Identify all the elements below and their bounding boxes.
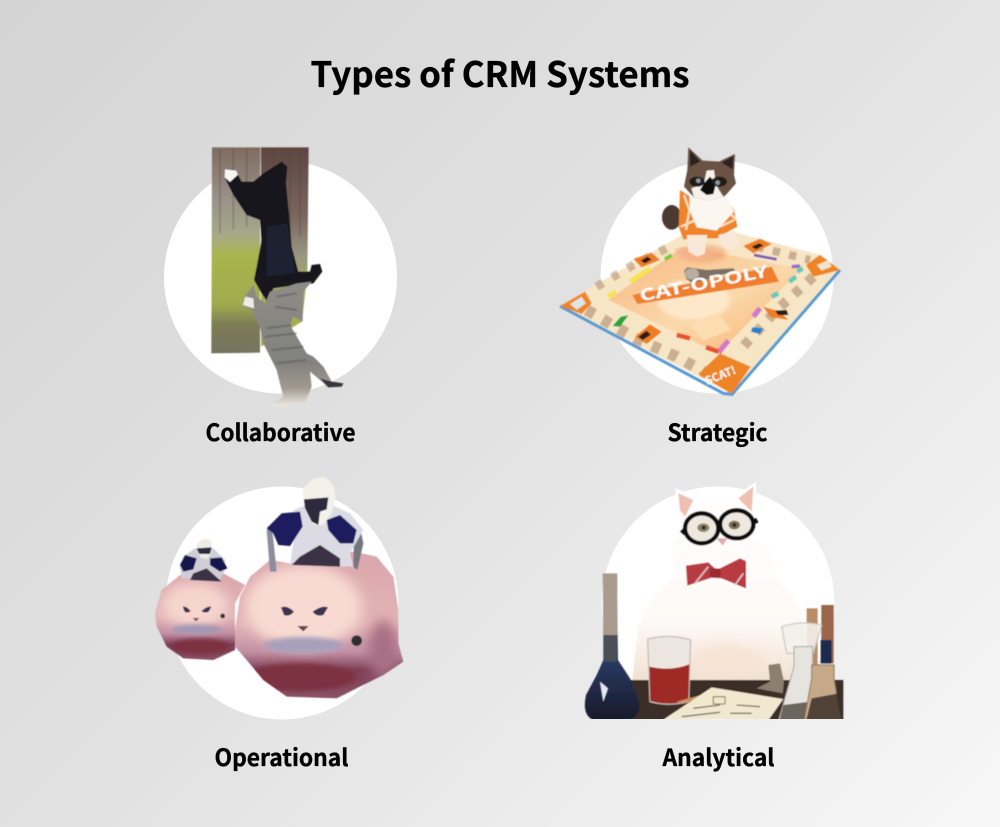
tile rows [587, 310, 707, 373]
corner text: SCAT! [703, 362, 738, 389]
icon: troopers riding fluffy cats [150, 477, 407, 700]
title: Types of CRM Systems [310, 47, 690, 98]
label: strategic: Strategic [668, 414, 768, 448]
beaker [648, 636, 691, 704]
cat on banner [684, 267, 735, 284]
label: collaborative: Collaborative [206, 414, 356, 448]
label: operational: Operational [214, 739, 348, 773]
test tubes [807, 608, 818, 665]
bow tie [686, 558, 746, 588]
icon: cat on a board game [560, 147, 840, 394]
tall flask [584, 610, 640, 719]
white circle: operational [166, 486, 398, 720]
corner tiles [560, 292, 592, 314]
banner [632, 267, 779, 304]
glasses [685, 513, 718, 543]
small toy [757, 663, 784, 693]
funnel and conical flasks [782, 623, 822, 653]
cat head [684, 147, 736, 201]
big trooper [267, 527, 277, 572]
panel: analytical [585, 482, 843, 773]
small trooper [180, 548, 225, 580]
icon: cats climbing a wooden post [211, 147, 343, 407]
label: analytical: Analytical [662, 739, 774, 773]
table [630, 679, 844, 719]
cat tail [662, 205, 681, 230]
panel: collaborative [164, 147, 397, 448]
cat body [679, 190, 737, 239]
panel: operational [150, 477, 407, 773]
white circle: strategic [600, 160, 834, 394]
notebook [662, 686, 784, 719]
white circle: analytical [602, 486, 834, 720]
icon: scientist cat with glasses and lab flasks [585, 482, 843, 727]
cat body [632, 482, 810, 685]
white circle: collaborative [164, 160, 397, 394]
banner name: CAT-OPOLY [637, 258, 771, 306]
panel: strategic [560, 147, 840, 448]
